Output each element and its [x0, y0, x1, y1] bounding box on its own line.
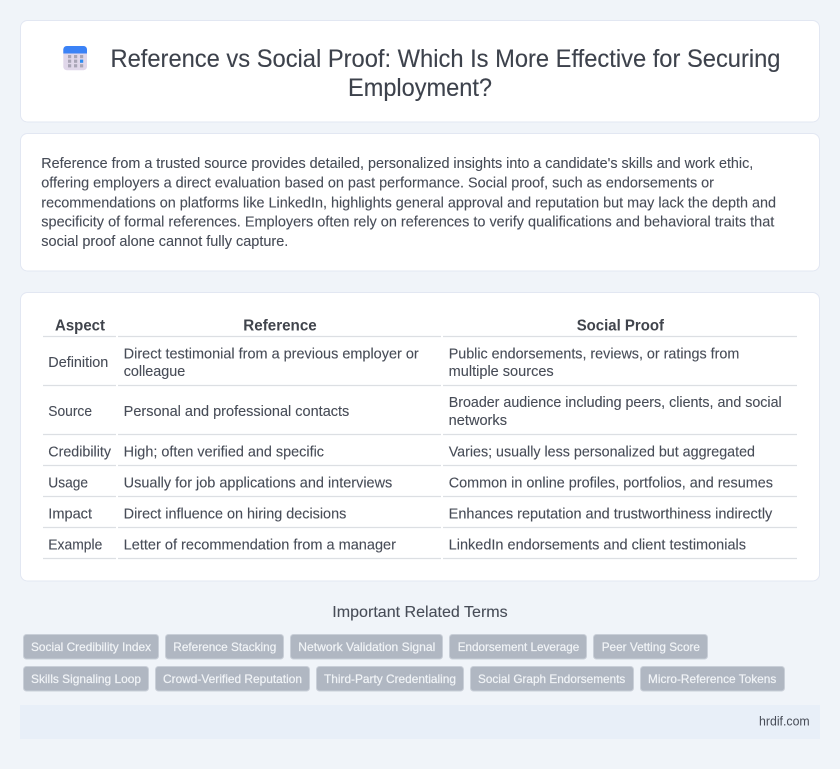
panel: intro paragraph: [20, 134, 820, 271]
title: [110, 45, 780, 102]
tag: Micro-Reference Tokens: Micro-Reference Tokens: [648, 672, 776, 686]
tag: Skills Signaling Loop: [24, 666, 148, 691]
table row: usage: [48, 475, 773, 491]
text block: intro: specificity of formal references. Employers often rely on references to verify qualifications and behavioral traits that: [41, 214, 774, 230]
tag: Reference Stacking: [166, 634, 284, 659]
table row: definition: [48, 346, 739, 380]
tag: Third-Party Credentialing: [316, 666, 464, 691]
text block: intro: recommendations on platforms like LinkedIn, highlights general approval and reputation but may lack the depth and: [41, 195, 776, 211]
table row: usage: Usually for job applications and interviews: [124, 475, 392, 491]
text block: intro: social proof alone cannot fully capture.: [41, 234, 288, 250]
tag: Third-Party Credentialing: Third-Party Credentialing: [324, 672, 456, 686]
tag: Endorsement Leverage: [450, 634, 586, 659]
table row: example: Example: [48, 537, 102, 553]
table row: impact: [48, 506, 773, 522]
table row: source: networks: [449, 413, 507, 429]
tag: Social Credibility Index: Social Credibility Index: [31, 640, 151, 654]
tag: Network Validation Signal: [290, 634, 442, 659]
tag: Peer Vetting Score: Peer Vetting Score: [602, 640, 700, 654]
title: Employment?: [348, 74, 492, 102]
table row: example: [48, 537, 746, 553]
tag: Skills Signaling Loop: Skills Signaling Loop: [31, 672, 141, 686]
panel: comparison table: [20, 292, 820, 581]
table row: example: LinkedIn endorsements and client testimonials: [449, 537, 746, 553]
tag: Endorsement Leverage: Endorsement Leverage: [458, 640, 580, 654]
table row: definition: multiple sources: [449, 364, 554, 380]
table row: definition: colleague: [124, 364, 185, 380]
tag: Peer Vetting Score: [594, 634, 708, 659]
text block: intro: offering employers a direct evaluation based on past performance. Social proof, such as endorsements or: [41, 176, 714, 192]
table row: impact: Impact: [48, 506, 92, 522]
table row: definition: Direct testimonial from a previous employer or: [124, 346, 419, 362]
footer: hrdif.com: [759, 714, 810, 729]
tag: Social Graph Endorsements: [470, 666, 634, 691]
table header row: Aspect: [55, 318, 106, 335]
panel: header: [20, 20, 820, 122]
table row: source: Source: [48, 404, 92, 420]
table row: source: [48, 395, 782, 429]
tag: Crowd-Verified Reputation: [156, 666, 310, 691]
table row: impact: Direct influence on hiring decisions: [124, 506, 346, 522]
tag: Network Validation Signal: Network Validation Signal: [298, 640, 435, 654]
heading: important related terms: Important Related Terms: [332, 604, 508, 621]
tag: Micro-Reference Tokens: [640, 666, 784, 691]
tag: Social Graph Endorsements: Social Graph Endorsements: [478, 672, 625, 686]
tag list: [24, 634, 784, 691]
tag: Social Credibility Index: [24, 634, 158, 659]
text block: intro: Reference from a trusted source provides detailed, personalized insights into a candidate's skills and work ethic,: [41, 156, 753, 172]
table row: example: Letter of recommendation from a manager: [124, 537, 396, 553]
title: Reference vs Social Proof: Which Is More Effective for Securing: [110, 45, 780, 73]
icon: calendar: [63, 46, 87, 70]
text block: intro: [41, 156, 776, 250]
tag: Crowd-Verified Reputation: Crowd-Verified Reputation: [163, 672, 302, 686]
table row: credibility: Credibility: [48, 445, 112, 461]
table row: definition: Definition: [48, 355, 108, 371]
table row: credibility: High; often verified and specific: [124, 445, 324, 461]
table row: credibility: [48, 445, 755, 461]
table row: source: Personal and professional contacts: [124, 404, 349, 420]
tag: Reference Stacking: Reference Stacking: [173, 640, 276, 654]
table row: usage: Usage: [48, 475, 88, 491]
table row: credibility: Varies; usually less personalized but aggregated: [449, 445, 755, 461]
table row: usage: Common in online profiles, portfolios, and resumes: [449, 475, 773, 491]
table header row: [55, 318, 665, 335]
footer: [20, 705, 820, 739]
table header row: Reference: [243, 318, 317, 335]
table row: source: Broader audience including peers, clients, and social: [449, 395, 782, 411]
table row: definition: Public endorsements, reviews, or ratings from: [449, 346, 739, 362]
table header row: Social Proof: [577, 318, 665, 335]
table row: impact: Enhances reputation and trustworthiness indirectly: [449, 506, 773, 522]
